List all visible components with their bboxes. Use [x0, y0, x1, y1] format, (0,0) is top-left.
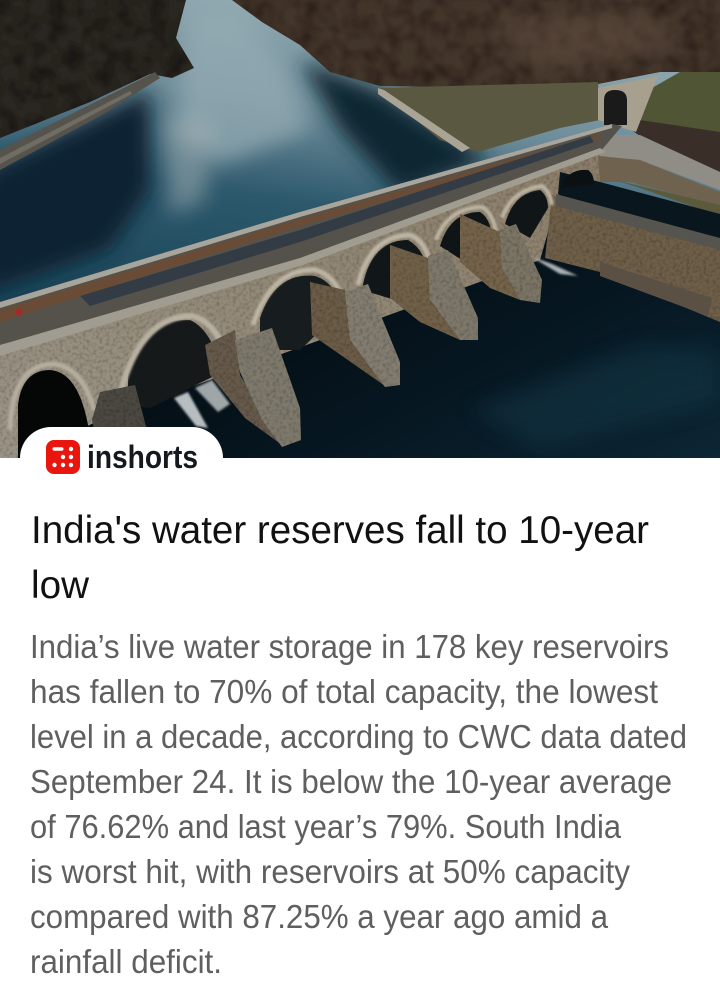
article text — [30, 509, 687, 980]
body paragraph: compared with 87.25% a year ago amid a — [30, 898, 609, 935]
channel behind gates — [558, 172, 720, 240]
body paragraph: India’s live water storage in 178 key reservoirs — [30, 628, 669, 665]
spillway foam — [174, 256, 578, 428]
body paragraph: rainfall deficit. — [30, 943, 222, 980]
title — [31, 509, 649, 607]
valve tower — [598, 76, 658, 132]
water ripple highlights — [470, 345, 720, 450]
right spillway gates — [545, 195, 720, 322]
body paragraph: has fallen to 70% of total capacity, the lowest — [30, 673, 658, 710]
title: low — [31, 564, 90, 607]
body paragraph — [30, 628, 687, 980]
grass slopes — [378, 72, 720, 172]
body paragraph: September 24. It is below the 10-year average — [30, 763, 672, 800]
dam wall and arches — [0, 135, 720, 458]
left forest and bank road — [0, 0, 194, 170]
hero photo: dam across a river — [0, 0, 720, 458]
dam crest road — [0, 124, 622, 356]
right forest — [232, 0, 720, 88]
title: India's water reserves fall to 10-year — [31, 509, 649, 552]
body paragraph: is worst hit, with reservoirs at 50% capacity — [30, 853, 630, 890]
river water — [0, 0, 720, 458]
road and abutment on the right — [598, 135, 720, 190]
body paragraph: of 76.62% and last year’s 79%. South India — [30, 808, 622, 845]
arches — [18, 370, 90, 458]
inshorts logo badge — [20, 427, 223, 487]
icon: inshorts red square — [46, 440, 80, 474]
body paragraph: level in a decade, according to CWC data dated — [30, 718, 687, 755]
dam buttress piers — [92, 214, 542, 458]
lower dark water — [0, 190, 720, 458]
arch rims — [10, 186, 552, 430]
